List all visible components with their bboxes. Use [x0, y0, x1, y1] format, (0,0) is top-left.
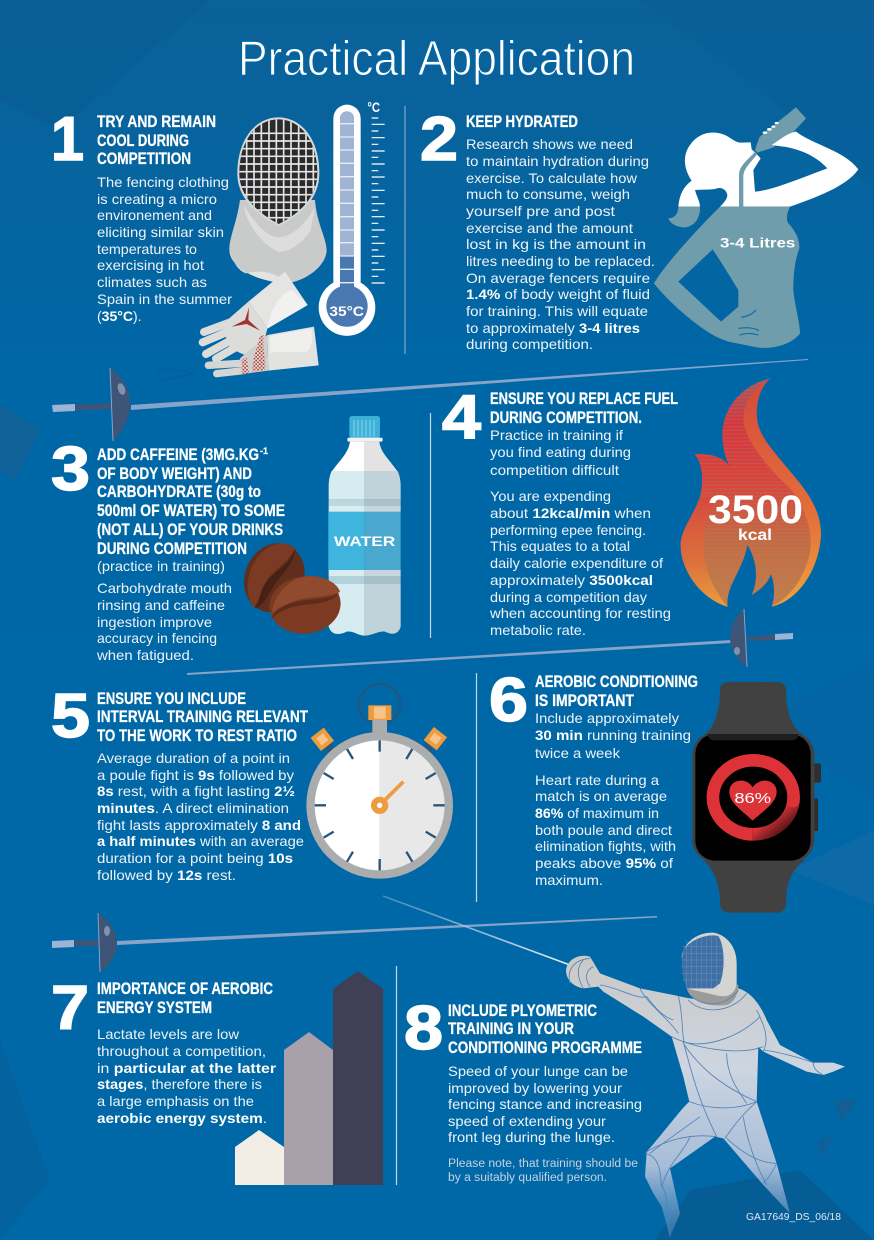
- body text 5: followed by 12s rest.: [97, 867, 236, 883]
- heading 1: TRY AND REMAIN: [97, 113, 216, 131]
- body text 5: minutes . A direct elimination: [97, 800, 289, 816]
- panel 2: keep hydrated: [420, 105, 858, 352]
- number 3: 3: [51, 435, 90, 504]
- heading 2: KEEP HYDRATED: [466, 113, 578, 131]
- body text 5: [97, 750, 304, 883]
- body text 8: Speed of your lunge can be: [448, 1063, 628, 1079]
- body text 4: [489, 427, 671, 638]
- heading 7: ENERGY SYSTEM: [97, 999, 212, 1017]
- body text 2: [466, 136, 655, 352]
- body text 6: [535, 710, 691, 888]
- heading 1: [97, 113, 216, 168]
- body text 1: environement and: [97, 207, 212, 223]
- body text 7: Lactate levels are low: [97, 1026, 240, 1042]
- heading 4: ENSURE YOU REPLACE FUEL: [490, 390, 678, 408]
- heading 8: TRAINING IN YOUR: [448, 1020, 574, 1038]
- icon: thermometer: [319, 99, 385, 336]
- heading 3: 500ml OF WATER) TO SOME: [97, 502, 285, 520]
- lower glove: [208, 327, 319, 374]
- body text 3: ingestion improve: [97, 614, 212, 630]
- body text 5: fight lasts approximately 8 and: [97, 817, 301, 833]
- body text 8: [448, 1063, 642, 1145]
- body text 2: On average fencers require: [466, 270, 650, 286]
- heading 7: IMPORTANCE OF AEROBIC: [97, 980, 273, 998]
- body text 2: exercise. To calculate how: [466, 170, 638, 186]
- body text 5: a half minutes with an average: [97, 833, 304, 849]
- heading 3: OF BODY WEIGHT) AND: [97, 465, 252, 483]
- flame unit: kcal: [738, 527, 772, 544]
- body text 4: This equates to a total: [490, 538, 630, 554]
- body text 6: 30 min running training: [535, 727, 691, 743]
- foil divider 1: [52, 359, 808, 441]
- body text 1: exercising in hot: [97, 257, 204, 273]
- number 5: 5: [51, 682, 90, 751]
- heading 5: [97, 690, 308, 745]
- note: Please note, that training should be: [448, 1158, 638, 1170]
- body text 5: duration for a point being 10s: [97, 850, 293, 866]
- watch label: 86%: [734, 791, 771, 807]
- panel 5: interval training: [51, 682, 453, 883]
- body text 3: rinsing and caffeine: [97, 597, 225, 613]
- number 6: 6: [489, 666, 528, 735]
- body text 2: during competition.: [466, 336, 593, 352]
- body text 1: Spain in the summer: [97, 291, 232, 307]
- body text 2: yourself pre and post: [466, 203, 615, 219]
- footer reference code: GA17649_DS_06/18: [746, 1212, 841, 1223]
- icon: woman drinking: [654, 107, 858, 348]
- heading 8: [448, 1002, 642, 1057]
- heading 3: [97, 446, 285, 558]
- upper glove: [203, 272, 308, 359]
- body text 5: 8s rest, with a fight lasting 2½: [97, 783, 295, 799]
- body text 8: front leg during the lunge.: [448, 1129, 615, 1145]
- body text 7: a large emphasis on the: [97, 1093, 254, 1109]
- heading 5: TO THE WORK TO REST RATIO: [97, 727, 297, 745]
- icon: fencer: [383, 896, 845, 1237]
- body text 7: throughout a competition,: [97, 1043, 266, 1059]
- number 2: 2: [420, 105, 458, 174]
- panel 1: remain cool: [51, 99, 385, 374]
- body text 4: daily calorie expenditure of: [490, 555, 663, 571]
- body text 4: metabolic rate.: [490, 622, 586, 638]
- body text 6: peaks above 95% of: [535, 855, 673, 871]
- heading 6: AEROBIC CONDITIONING: [535, 673, 698, 691]
- body text 2: lost in kg is the amount in: [466, 236, 646, 252]
- body text 6: Heart rate during a: [535, 772, 659, 788]
- heading 6: [535, 673, 698, 710]
- body text 2: to maintain hydration during: [466, 153, 649, 169]
- body text 4: approximately 3500kcal: [490, 572, 653, 588]
- body text 4: about 12kcal/min when: [490, 505, 651, 521]
- panel 7: aerobic energy system: [51, 971, 383, 1185]
- heading 3: -1: [260, 446, 268, 456]
- body text 2: for training. This will equate: [466, 303, 648, 319]
- body text 3: (practice in training): [97, 558, 225, 574]
- body text 7: aerobic energy system .: [97, 1110, 267, 1126]
- body text 6: match is on average: [535, 788, 667, 804]
- heading 3: CARBOHYDRATE (30g to: [97, 483, 261, 501]
- body text 7: [97, 1026, 277, 1126]
- body text 5: a poule fight is 9s followed by: [97, 767, 294, 783]
- icon: stopwatch: [306, 684, 453, 879]
- foil divider 2: [187, 609, 793, 675]
- body text 4: performing epee fencing.: [490, 522, 646, 538]
- body text 4: competition difficult: [490, 462, 619, 478]
- heading 6: IS IMPORTANT: [535, 692, 634, 710]
- panel 6: aerobic conditioning: [489, 666, 821, 913]
- body text 8: improved by lowering your: [448, 1080, 622, 1096]
- body text 1: is creating a micro: [97, 191, 217, 207]
- body text 2: 1.4% of body weight of fluid: [466, 286, 650, 302]
- body text 7: in particular at the latter: [97, 1060, 277, 1076]
- bar chart: rising arrows: [235, 971, 383, 1185]
- panel 8: plyometric training: [404, 994, 642, 1184]
- thermometer label: 35°C: [329, 304, 364, 319]
- body text 1: temperatures to: [97, 241, 197, 257]
- body text 1: eliciting similar skin: [97, 224, 224, 240]
- body text 2: litres needing to be replaced.: [466, 253, 655, 269]
- panel 3: caffeine: [51, 416, 401, 663]
- body text 8: speed of extending your: [448, 1113, 606, 1129]
- body text 1: climates such as: [97, 274, 207, 290]
- body text 3: Carbohydrate mouth: [97, 580, 232, 596]
- body text 6: twice a week: [535, 745, 621, 761]
- body text 4: when accounting for resting: [489, 605, 671, 621]
- number 4: 4: [442, 383, 482, 452]
- body text 4: Practice in training if: [490, 427, 623, 443]
- heading 5: INTERVAL TRAINING RELEVANT: [97, 708, 308, 726]
- heading 3: ADD CAFFEINE (3MG.KG: [97, 446, 259, 464]
- body text 5: Average duration of a point in: [97, 750, 290, 766]
- body text 1: The fencing clothing: [97, 174, 229, 190]
- woman label: 3-4 Litres: [720, 236, 796, 251]
- body text 2: much to consume, weigh: [466, 186, 630, 202]
- heading 4: DURING COMPETITION.: [490, 409, 642, 427]
- body text 4: during a competition day: [490, 589, 647, 605]
- icon: flame: [681, 378, 821, 607]
- heading 4: [490, 390, 678, 427]
- body text 4: you find eating during: [490, 444, 631, 460]
- body text 6: Include approximately: [535, 710, 679, 726]
- number 1: 1: [51, 105, 84, 174]
- heading 1: COOL DURING: [97, 132, 189, 150]
- icon: water bottle: [328, 416, 401, 636]
- body text 1: (35°C).: [97, 308, 142, 324]
- heading 7: [97, 980, 273, 1017]
- heading 3: (NOT ALL) OF YOUR DRINKS: [97, 521, 283, 539]
- body text 6: both poule and direct: [535, 822, 672, 838]
- body text 2: Research shows we need: [466, 136, 633, 152]
- heading 5: ENSURE YOU INCLUDE: [97, 690, 246, 708]
- body text 3: [96, 558, 232, 663]
- title: Practical Application: [238, 32, 635, 86]
- note: by a suitably qualified person.: [448, 1172, 607, 1184]
- body text 7: stages, therefore there is: [97, 1076, 262, 1092]
- foil divider 3: [52, 913, 657, 972]
- heading 3: DURING COMPETITION: [97, 540, 247, 558]
- heading 8: CONDITIONING PROGRAMME: [448, 1039, 642, 1057]
- panel 4: replace fuel: [442, 378, 821, 638]
- number 8: 8: [404, 994, 443, 1063]
- body text 2: exercise and the amount: [466, 220, 633, 236]
- bottle label: WATER: [334, 533, 395, 549]
- body text 3: accuracy in fencing: [97, 630, 217, 646]
- thermometer unit: °C: [367, 99, 380, 115]
- body text 2: to approximately 3-4 litres: [466, 320, 640, 336]
- number 7: 7: [51, 974, 89, 1043]
- icon: coffee beans: [234, 534, 343, 637]
- divider: vertical lines: [396, 106, 476, 1185]
- icon: smart watch: [692, 682, 821, 913]
- heading 1: COMPETITION: [97, 150, 191, 168]
- body text 4: You are expending: [490, 488, 611, 504]
- body text 1: [97, 174, 232, 324]
- body text 3: when fatigued.: [96, 647, 194, 663]
- note: [448, 1158, 638, 1184]
- body text 6: 86% of maximum in: [535, 805, 659, 821]
- body text 6: elimination fights, with: [535, 838, 676, 854]
- icon: fencing mask and gloves: [203, 117, 327, 374]
- body text 6: maximum.: [535, 872, 603, 888]
- body text 8: fencing stance and increasing: [448, 1096, 642, 1112]
- flame label: 3500: [708, 488, 803, 532]
- heading 8: INCLUDE PLYOMETRIC: [448, 1002, 597, 1020]
